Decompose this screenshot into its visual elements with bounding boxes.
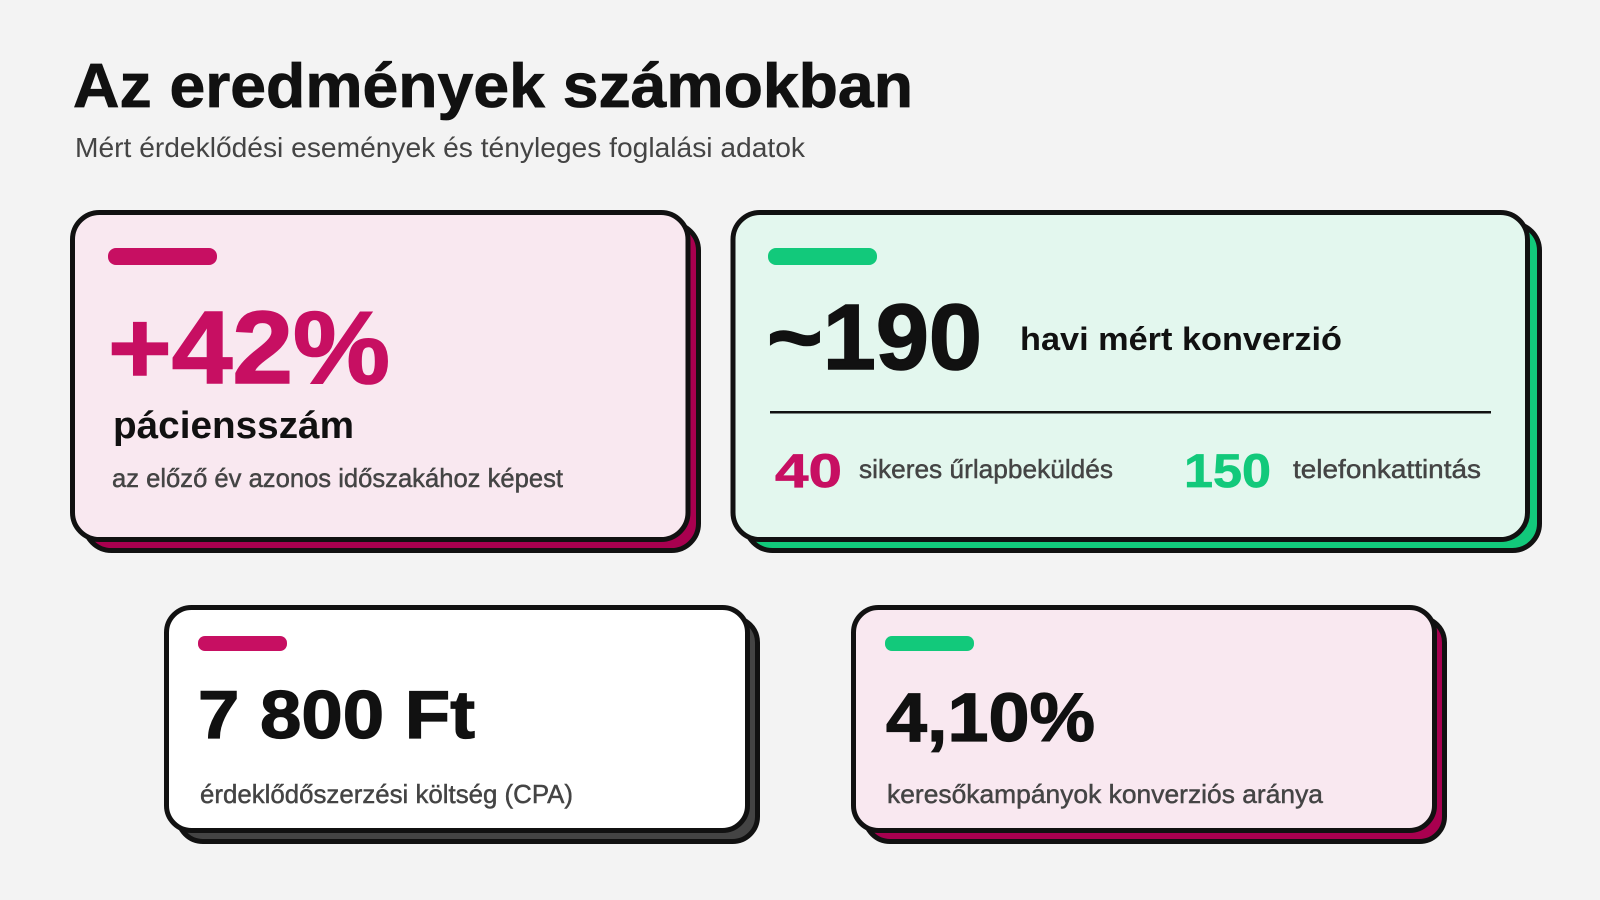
panel: conversion rate [854,608,1444,842]
accent pill [768,248,877,265]
big number: 4,10%: 4,10% [886,679,1095,756]
subtitle: Mért érdeklődési események és tényleges foglalási adatok [75,132,806,163]
panel: patient growth [72,212,698,550]
stat: phone clicks: 150 [1184,444,1271,497]
divider [770,411,1491,414]
stat: form submissions: 40 [775,444,842,497]
accent pill [198,636,287,651]
stat: form submissions: sikeres űrlapbeküldés [859,454,1113,484]
big number: 7 800 Ft: 7 800 Ft [198,677,475,753]
stat: phone clicks: telefonkattintás [1293,454,1481,484]
panel: cost per acquisition [166,608,758,842]
note: keresőkampányok konverziós aránya [887,779,1324,809]
label: havi mért konverzió: havi mért konverzió [1020,321,1342,357]
stat: phone clicks [1184,444,1481,497]
big number: +42%: +42% [108,290,390,405]
panel: monthly conversions [733,212,1540,550]
note: az előző év azonos időszakához képest [112,463,564,493]
note: érdeklődőszerzési költség (CPA) [200,779,573,809]
stat: form submissions [775,444,1113,497]
title: Az eredmények számokban [73,52,913,121]
label: páciensszám: páciensszám [113,405,354,447]
accent pill [108,248,217,265]
big number: ~190: ~190 [767,285,982,389]
accent pill [885,636,974,651]
